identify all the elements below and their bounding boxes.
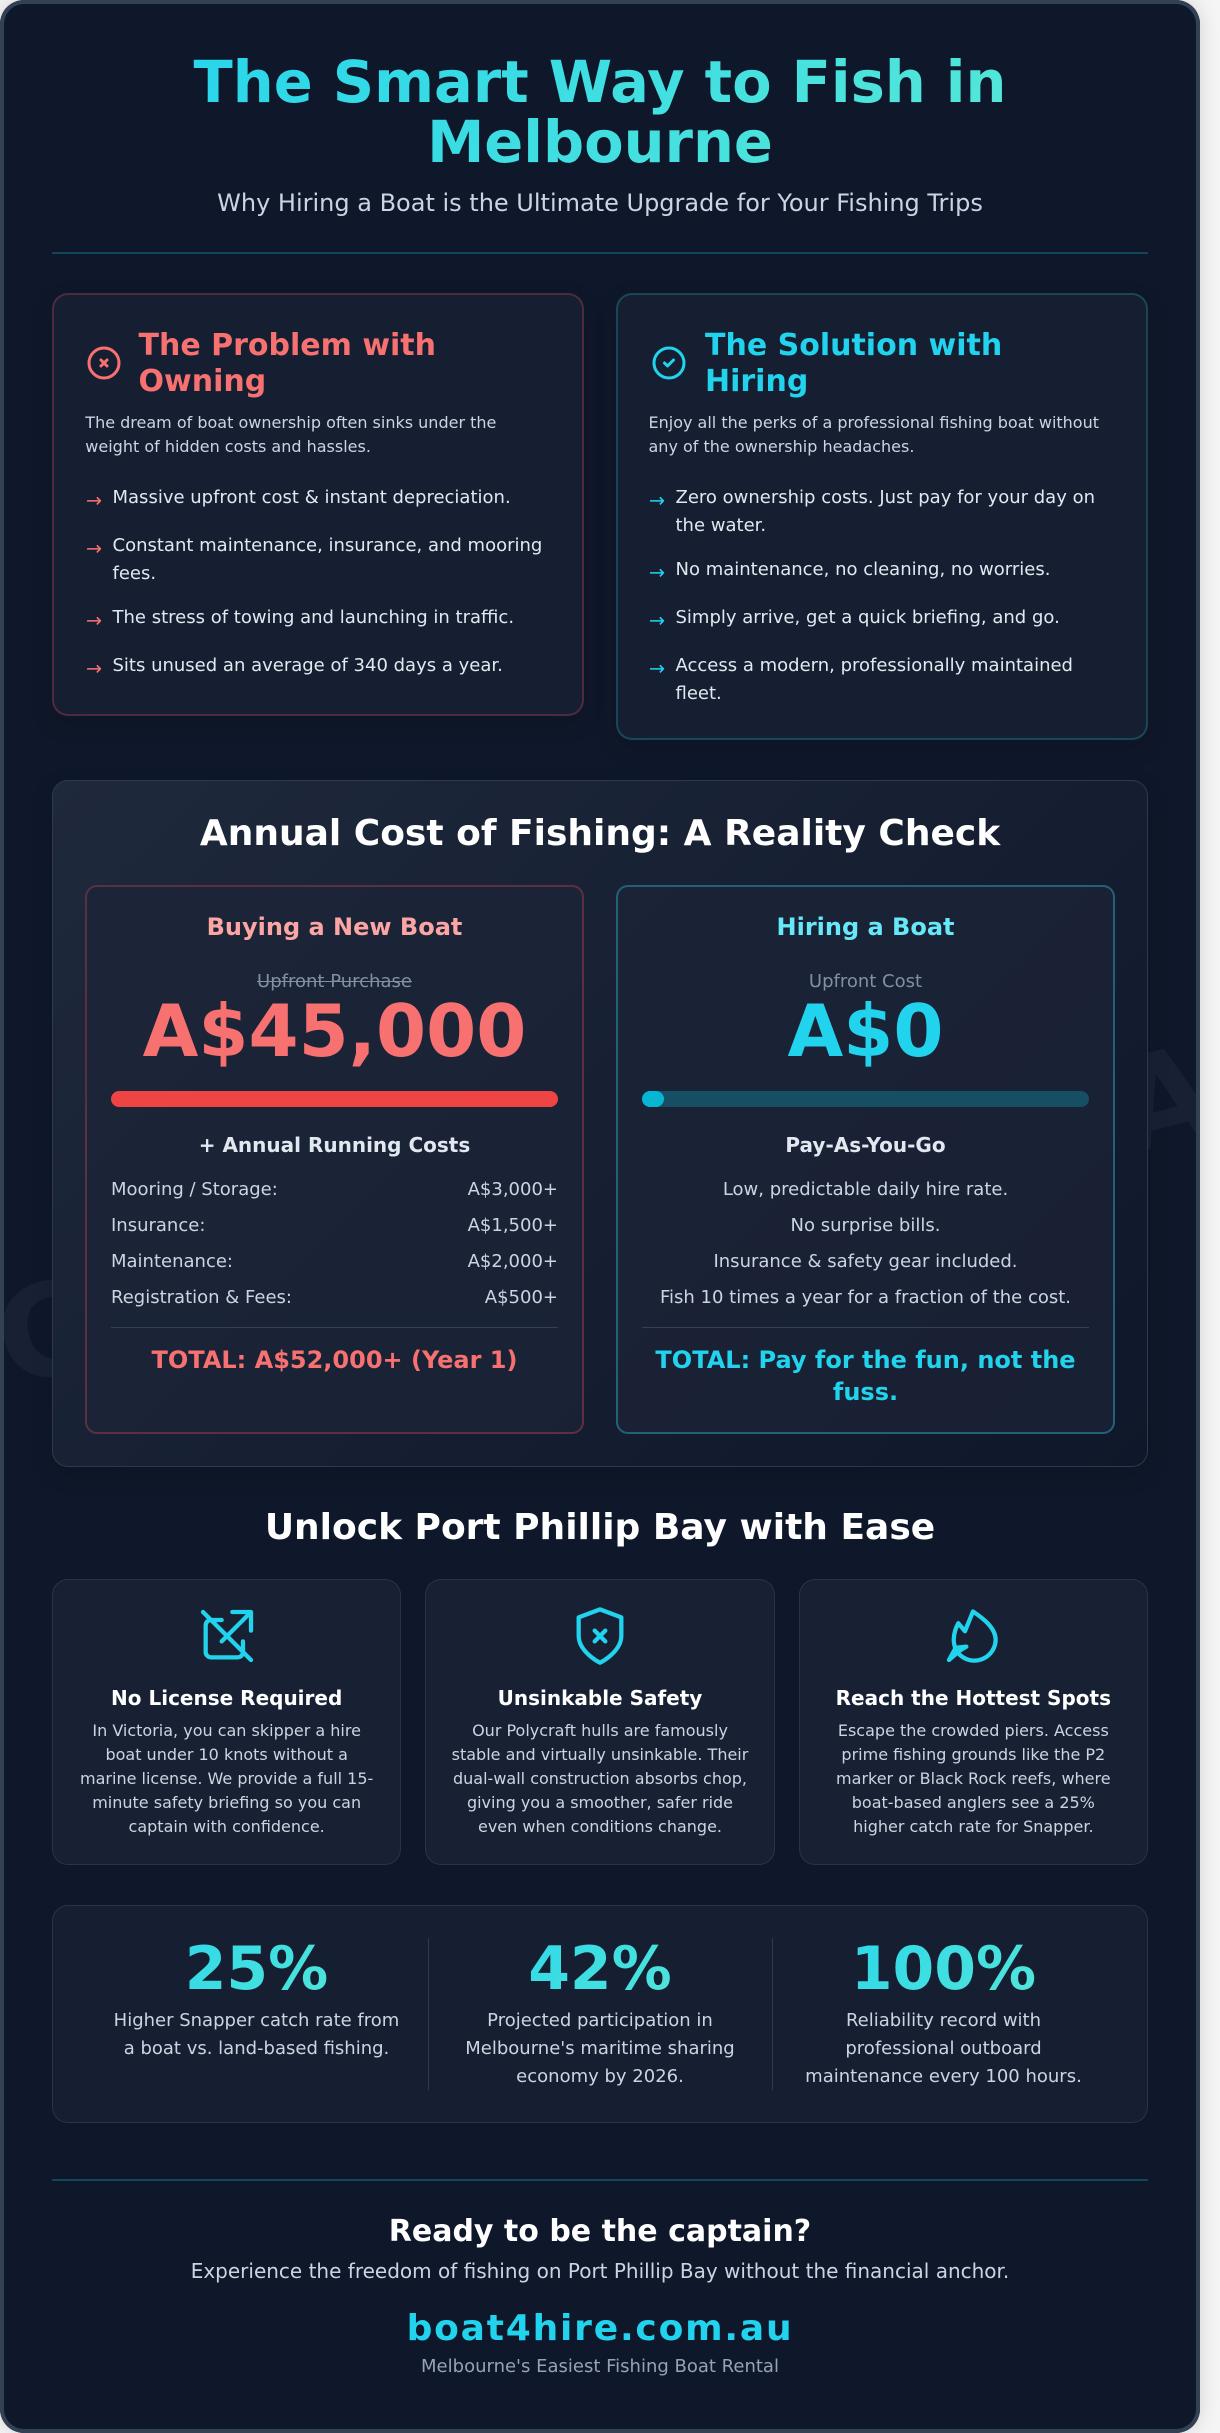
- row: no surprise: No surprise bills.: [791, 1215, 940, 1236]
- list item 1: [86, 487, 511, 512]
- card text: Our Polycraft hulls are famously: [472, 1721, 728, 1740]
- row: registration: A$500+: [485, 1287, 558, 1308]
- card text: captain with confidence.: [129, 1817, 325, 1836]
- cta text: Experience the freedom of fishing on Port Phillip Bay without the financial anchor.: [191, 2259, 1009, 2283]
- solution list: Simply arrive, get a quick briefing, and go.: [676, 607, 1060, 628]
- card: no license required: [52, 1579, 401, 1865]
- row: fish ten times: Fish 10 times a year for a fraction of the cost.: [660, 1287, 1071, 1308]
- problem list: →: [86, 537, 102, 560]
- card: reach the hottest spots: [799, 1579, 1148, 1865]
- card text: In Victoria, you can skipper a hire: [92, 1721, 361, 1740]
- solution list: →: [649, 657, 665, 680]
- problem description: The dream of boat ownership often sinks under the: [85, 413, 496, 432]
- problem list: Massive upfront cost & instant depreciation.: [112, 487, 511, 508]
- title: Melbourne: [427, 109, 773, 176]
- row: insurance: [111, 1215, 558, 1236]
- problem list: →: [86, 609, 102, 632]
- stat label: Projected participation in: [487, 2010, 713, 2031]
- row: mooring: Mooring / Storage:: [111, 1179, 278, 1200]
- solution description: [648, 413, 1099, 456]
- panel: statistics: [52, 1905, 1148, 2123]
- stat label: [465, 2010, 735, 2087]
- running costs heading: + Annual Running Costs: [199, 1133, 470, 1157]
- stat number: 25%: [185, 1934, 328, 2004]
- total: hiring: TOTAL: Pay for the fun, not the: [655, 1346, 1076, 1374]
- footer call to action: [191, 2214, 1009, 2377]
- problem list: The stress of towing and launching in traffic.: [112, 607, 514, 628]
- heading: problem: Owning: [138, 364, 266, 398]
- total: buying: TOTAL: A$52,000+ (Year 1): [152, 1346, 517, 1374]
- subtitle: Why Hiring a Boat is the Ultimate Upgrade for Your Fishing Trips: [217, 189, 983, 217]
- stat label: Reliability record with: [846, 2010, 1041, 2031]
- buying title: Buying a New Boat: [207, 913, 462, 941]
- card text: boat-based anglers see a 25%: [852, 1793, 1095, 1812]
- icon: check in circle: [652, 346, 686, 380]
- card title: Reach the Hottest Spots: [836, 1686, 1111, 1710]
- column: buying a new boat: [85, 885, 584, 1434]
- solution list: [649, 487, 1095, 704]
- heading: problem: [138, 328, 436, 398]
- stat number: [428, 1935, 772, 2003]
- column: hiring a boat: [616, 885, 1115, 1434]
- list item 3: [649, 607, 1060, 632]
- problem list: →: [86, 489, 102, 512]
- card text: [836, 1721, 1111, 1836]
- icon: flame: [946, 1609, 998, 1663]
- heading: annual cost: Annual Cost of Fishing: A Reality Check: [200, 812, 1000, 854]
- icon: shield: [576, 1607, 624, 1665]
- stat label: Higher Snapper catch rate from: [114, 2010, 399, 2031]
- row: insurance: Insurance:: [111, 1215, 205, 1236]
- stat number: [772, 1935, 1115, 2003]
- row: maintenance: A$2,000+: [468, 1251, 558, 1272]
- upfront cost label: Upfront Cost: [809, 971, 922, 992]
- solution list: →: [649, 561, 665, 584]
- list item 2: [86, 535, 542, 584]
- heading: solution: Hiring: [705, 364, 808, 398]
- icon: x in circle: [88, 346, 120, 380]
- card text: prime fishing grounds like the P2: [841, 1745, 1105, 1764]
- card text: marine license. We provide a full 15-: [80, 1769, 373, 1788]
- tagline: Melbourne's Easiest Fishing Boat Rental: [421, 2356, 779, 2377]
- heading: problem: The Problem with: [138, 328, 436, 362]
- row: insurance: A$1,500+: [468, 1215, 558, 1236]
- solution description: any of the ownership headaches.: [648, 437, 914, 456]
- row: registration: Registration & Fees:: [111, 1287, 292, 1308]
- title: The Smart Way to Fish in: [194, 49, 1006, 116]
- cost bar: [111, 1091, 558, 1107]
- solution list: the water.: [676, 515, 766, 536]
- header: [194, 49, 1006, 217]
- solution list: Zero ownership costs. Just pay for your day on: [676, 487, 1095, 508]
- card text: higher catch rate for Snapper.: [853, 1817, 1094, 1836]
- title: [52, 53, 1148, 173]
- list item 1: [649, 487, 1095, 536]
- amount: A$45,000: [143, 989, 526, 1073]
- solution list: Access a modern, professionally maintained: [676, 655, 1073, 676]
- row: registration: [111, 1287, 558, 1308]
- stat: 42%: [465, 1934, 735, 2087]
- card text: stable and virtually unsinkable. Their: [452, 1745, 748, 1764]
- card text: minute safety briefing so you can: [92, 1793, 361, 1812]
- stat label: a boat vs. land-based fishing.: [124, 2038, 389, 2059]
- row: maintenance: [111, 1251, 558, 1272]
- problem list: [86, 487, 542, 680]
- row: mooring: A$3,000+: [468, 1179, 558, 1200]
- solution list: No maintenance, no cleaning, no worries.: [676, 559, 1050, 580]
- row: maintenance: Maintenance:: [111, 1251, 233, 1272]
- hiring title: Hiring a Boat: [776, 913, 954, 941]
- problem list: →: [86, 657, 102, 680]
- card text: boat under 10 knots without a: [105, 1745, 348, 1764]
- total: hiring: fuss.: [833, 1378, 898, 1406]
- stat label: economy by 2026.: [516, 2066, 684, 2087]
- stat: 100%: [805, 1934, 1082, 2087]
- card: unsinkable safety: [425, 1579, 775, 1865]
- solution list: fleet.: [676, 683, 722, 704]
- list item 4: [86, 655, 503, 680]
- cost bar: [642, 1091, 1089, 1107]
- card text: [452, 1721, 748, 1836]
- stat label: maintenance every 100 hours.: [805, 2066, 1082, 2087]
- bar fill: [642, 1091, 664, 1107]
- pay as you go heading: Pay-As-You-Go: [785, 1133, 946, 1157]
- row: insurance included: Insurance & safety gear included.: [713, 1251, 1018, 1272]
- row: daily rate: Low, predictable daily hire rate.: [723, 1179, 1008, 1200]
- card text: Escape the crowded piers. Access: [838, 1721, 1109, 1740]
- stat label: professional outboard: [845, 2038, 1042, 2059]
- list item 4: [649, 655, 1073, 704]
- upfront purchase label: Upfront Purchase: [257, 971, 412, 992]
- solution list: →: [649, 489, 665, 512]
- heading: unlock port phillip bay: Unlock Port Phillip Bay with Ease: [265, 1506, 935, 1548]
- problem list: Constant maintenance, insurance, and mooring: [112, 535, 542, 556]
- panel: the solution with hiring: [616, 293, 1148, 740]
- card text: even when conditions change.: [478, 1817, 722, 1836]
- cta heading: Ready to be the captain?: [389, 2214, 811, 2248]
- stat: 25%: [114, 1934, 399, 2059]
- total: hiring: [655, 1346, 1076, 1406]
- problem description: [85, 413, 496, 456]
- panel: the problem with owning: [52, 293, 584, 716]
- row: mooring: [111, 1179, 558, 1200]
- list item 2: [649, 559, 1050, 584]
- stat number: 100%: [851, 1934, 1036, 2004]
- heading: solution: The Solution with: [705, 328, 1002, 362]
- problem list: fees.: [112, 563, 156, 584]
- problem list: Sits unused an average of 340 days a year.: [112, 655, 503, 676]
- list item 3: [86, 607, 514, 632]
- card text: [80, 1721, 373, 1836]
- stat label: [805, 2010, 1082, 2087]
- card text: marker or Black Rock reefs, where: [836, 1769, 1111, 1788]
- solution list: →: [649, 609, 665, 632]
- card title: Unsinkable Safety: [498, 1686, 702, 1710]
- stat number: 42%: [528, 1934, 672, 2004]
- stat number: [85, 1935, 428, 2003]
- icon: no license: [200, 1610, 254, 1662]
- heading: solution: [705, 328, 1002, 398]
- amount: A$0: [788, 989, 943, 1073]
- problem description: weight of hidden costs and hassles.: [85, 437, 371, 456]
- panel: annual cost comparison: [52, 780, 1148, 1467]
- stat label: Melbourne's maritime sharing: [465, 2038, 735, 2059]
- card text: dual-wall construction absorbs chop,: [453, 1769, 747, 1788]
- card title: No License Required: [111, 1686, 342, 1710]
- solution description: Enjoy all the perks of a professional fishing boat without: [648, 413, 1099, 432]
- card text: giving you a smoother, safer ride: [467, 1793, 733, 1812]
- website: boat4hire.com.au: [407, 2308, 793, 2349]
- stat label: [114, 2010, 399, 2059]
